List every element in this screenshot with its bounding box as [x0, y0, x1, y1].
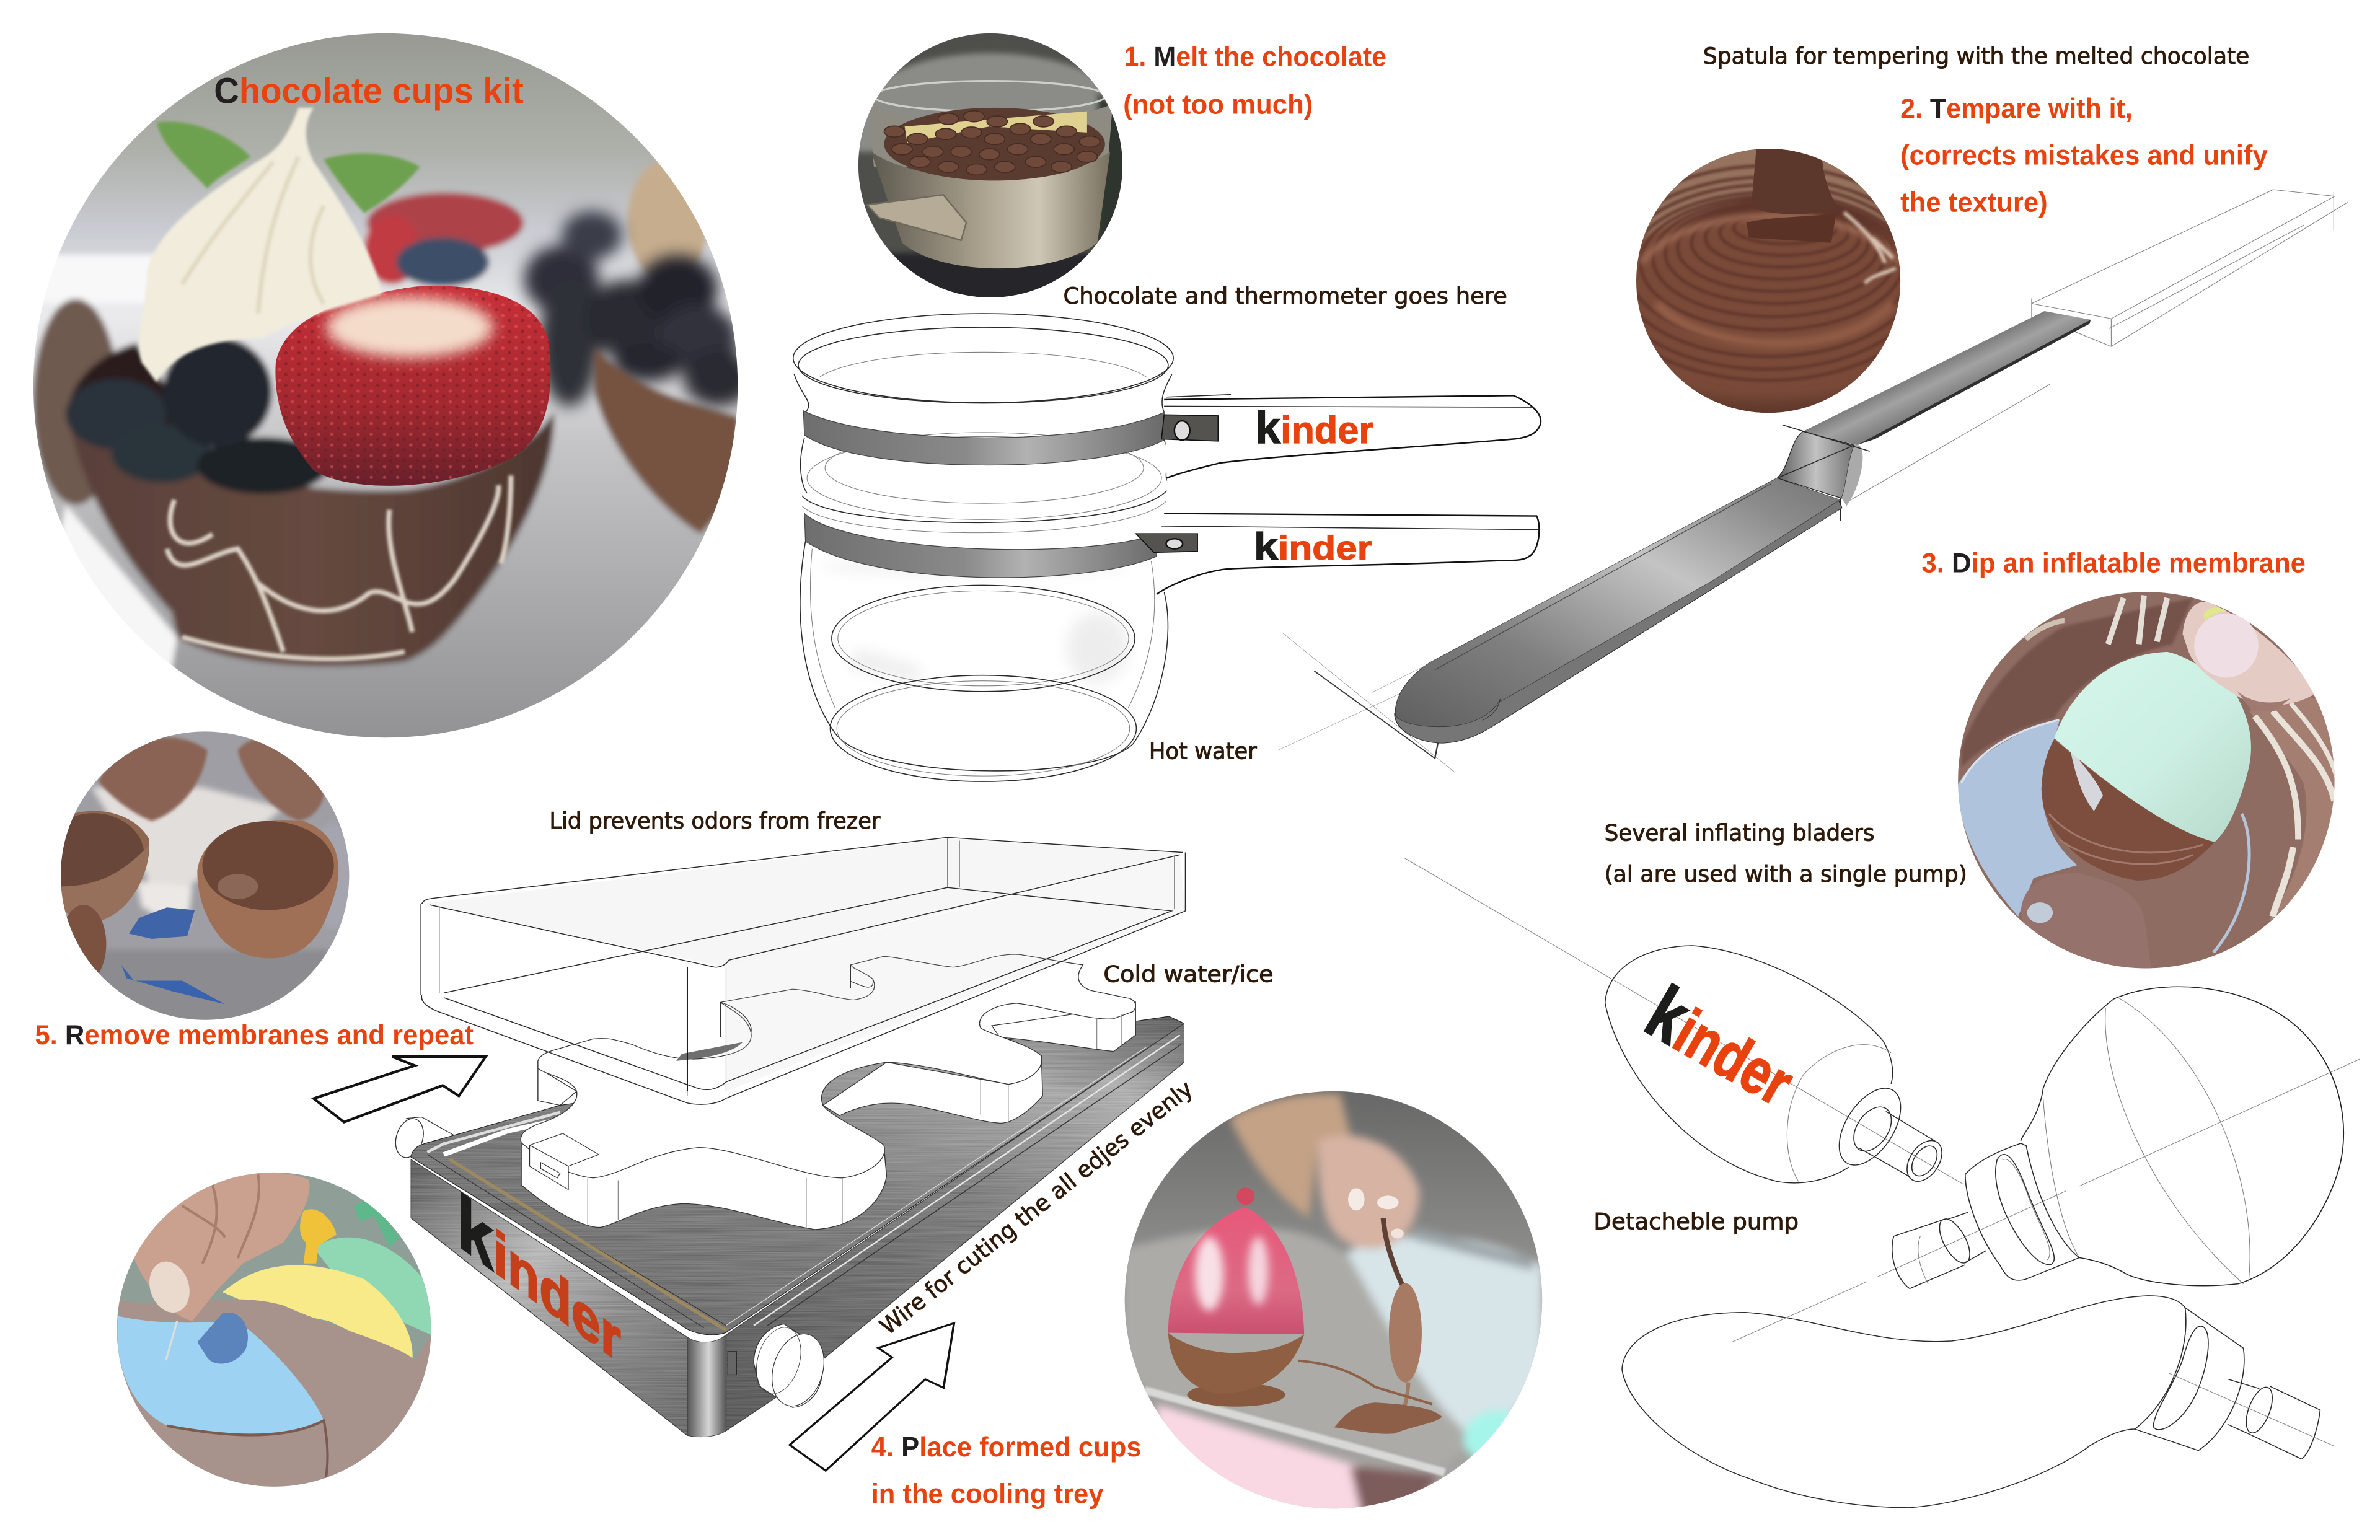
blade and handle	[1277, 478, 1842, 772]
handle upper	[1161, 395, 1541, 478]
step 2 note line 1: (corrects mistakes and unify	[1900, 141, 2268, 171]
label: detachable pump: Detacheble pump	[1593, 1208, 1799, 1235]
photo: pink balloon chocolate cup	[1119, 1085, 1549, 1519]
tray knob front	[728, 1324, 831, 1410]
upper pan glass	[793, 314, 1173, 683]
arrow: lid direction	[314, 1057, 486, 1122]
arrow: tray direction	[790, 1323, 954, 1471]
step 2 note line 2: the texture)	[1900, 188, 2048, 218]
label: hot water: Hot water	[1149, 738, 1258, 765]
tray knob back	[392, 1117, 455, 1159]
label: several inflating bladders line 1: Several inflating bladers	[1605, 820, 1874, 847]
transparent lid	[421, 837, 1186, 1104]
photo: dipping balloon	[1954, 587, 2339, 973]
step 4 note: in the cooling trey	[871, 1479, 1104, 1510]
title: Chocolate cups kit: Chocolate cups kit	[214, 71, 524, 112]
photo: tempered chocolate swirl	[1636, 149, 1900, 413]
step 1 heading: 1. Melt the chocolate	[1124, 42, 1386, 73]
label: several inflating bladders line 2: (al are used with a single pump)	[1605, 861, 1967, 887]
tray top	[411, 1016, 1184, 1335]
illustration: double boiler	[793, 314, 1541, 781]
illustration: cooling tray	[392, 837, 1186, 1437]
photo: melting chocolate over steel pot	[858, 33, 1123, 297]
pump bulb	[1732, 987, 2360, 1342]
metal band lower	[804, 513, 1159, 578]
tray rail details	[427, 1035, 1181, 1330]
logo: kinder on bladder: kinder	[1633, 969, 1810, 1121]
construction lines upper	[1778, 190, 2348, 521]
label: spatula: Spatula for tempering with the melted chocolate	[1703, 43, 2249, 69]
label: chocolate and thermometer: Chocolate and thermometer goes here	[1064, 283, 1507, 309]
tray right face	[726, 1023, 1184, 1431]
illustration: detachable pump	[1622, 987, 2360, 1508]
illustration: spatula	[1277, 190, 2348, 772]
label: lid prevents odors: Lid prevents odors from frezer	[550, 807, 881, 834]
photo: chocolate cup with berries	[20, 20, 754, 755]
logo: kinder lower handle: kinder	[1254, 525, 1372, 567]
photo: finished chocolate cups	[61, 731, 350, 1020]
lower pan glass	[800, 541, 1168, 781]
illustration: inflatable bladder	[1404, 858, 1963, 1187]
step 5 heading: 5. Remove membranes and repeat	[35, 1020, 474, 1050]
pump handle	[1622, 1296, 2334, 1508]
logo: kinder upper handle: kinder	[1255, 402, 1373, 453]
metal band upper	[803, 411, 1164, 465]
photo: deflating membranes	[112, 1169, 440, 1499]
label: wire for cutting edges: Wire for cuting the all edjes evenly	[875, 1075, 1198, 1340]
cold water puzzle block	[521, 954, 1135, 1230]
handle lower	[1136, 513, 1539, 594]
logo: kinder on tray: kinder	[457, 1176, 621, 1380]
step 1 note: (not too much)	[1123, 90, 1313, 120]
step 4 heading: 4. Place formed cups	[871, 1432, 1142, 1463]
tray corner	[687, 1335, 726, 1437]
label: cold water or ice: Cold water/ice	[1103, 961, 1274, 988]
step 2 heading: 2. Tempare with it,	[1900, 94, 2133, 124]
tray front face	[411, 1159, 687, 1435]
step 3 heading: 3. Dip an inflatable membrane	[1921, 548, 2306, 578]
